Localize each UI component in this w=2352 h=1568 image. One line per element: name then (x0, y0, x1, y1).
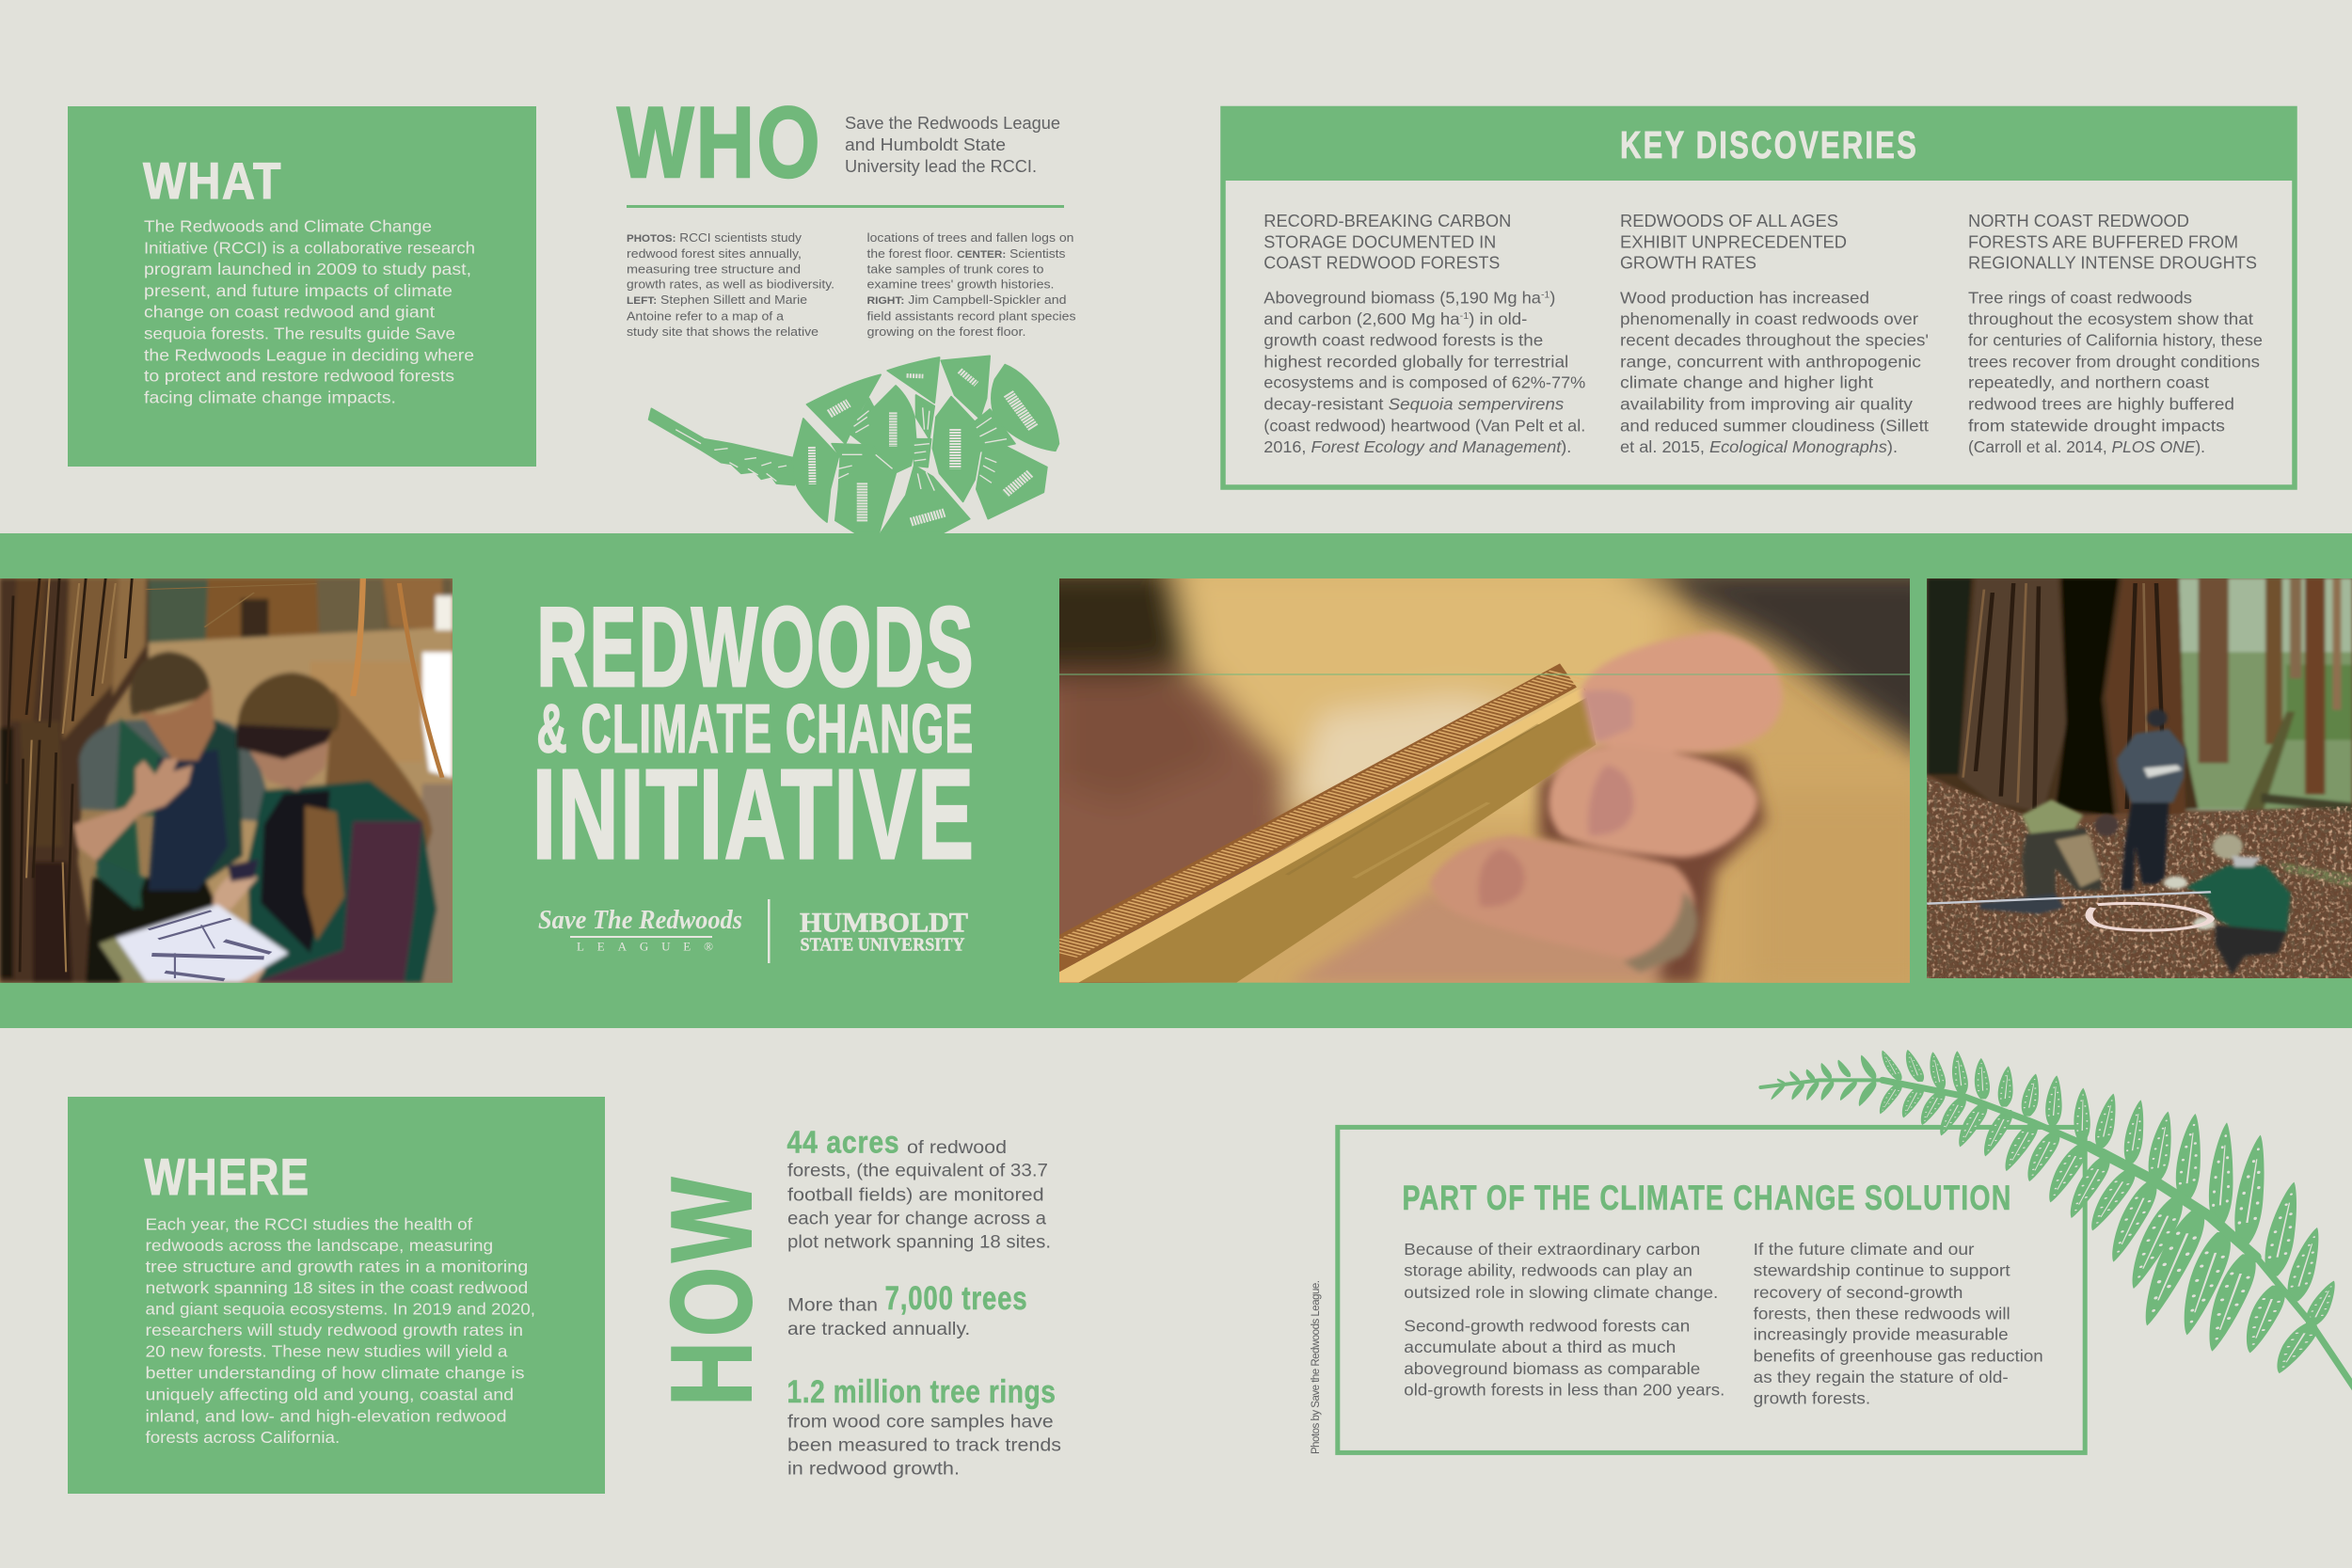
column: north coast redwood: for centuries of California history, these (1968, 331, 2263, 350)
title: redwoods and climate change initiative (532, 584, 976, 885)
column: north coast redwood: NORTH COAST REDWOOD (1968, 212, 2189, 230)
column: north coast redwood (1968, 212, 2263, 456)
stat: 44 acres: 44 acres (787, 1125, 899, 1160)
text block: what description: facing climate change impacts. (144, 388, 396, 406)
text block: what description: program launched in 2009 to study past, (144, 260, 471, 278)
column: record-breaking carbon: and carbon (2,600 Mg ha (1263, 309, 1449, 328)
heading: who: WHO (617, 86, 822, 198)
text block: photo captions: field assistants record plant species (867, 309, 1076, 324)
text block: solution right column: increasingly provide measurable (1754, 1324, 2009, 1343)
text block: where description: uniquely affecting old and young, coastal and (145, 1385, 514, 1403)
text block: solution left column: old-growth forests in less than 200 years. (1404, 1380, 1724, 1399)
column: redwoods of all ages: REDWOODS OF ALL AGES (1620, 212, 1838, 230)
text block: photo captions: locations of trees and fallen logs on (867, 230, 1074, 245)
text block: solution right column: growth forests. (1754, 1389, 1870, 1408)
text block: what description: change on coast redwood and giant (144, 302, 435, 321)
column: record-breaking carbon: COAST REDWOOD FORESTS (1263, 254, 1500, 273)
column: record-breaking carbon: -1 (1460, 311, 1470, 322)
column: redwoods of all ages: phenomenally in coast redwoods over (1620, 309, 1918, 328)
heading: climate change solution: PART OF THE CLIMATE CHANGE SOLUTION (1402, 1179, 2011, 1217)
text block: solution right column: benefits of greenhouse gas reduction (1754, 1346, 2043, 1365)
text block: who lead: and Humboldt State (845, 135, 1006, 154)
column: north coast redwood: redwood trees are highly buffered (1968, 394, 2234, 413)
text block: photo captions: Antoine refer to a map of a (627, 309, 785, 324)
text block: where description: Each year, the RCCI studies the health of (145, 1214, 472, 1233)
column: record-breaking carbon: growth coast redwood forests is the (1263, 331, 1543, 350)
column: redwoods of all ages: availability from improving air quality (1620, 394, 1913, 413)
text block: photo captions: measuring tree structure and (627, 261, 801, 277)
column: record-breaking carbon: RECORD-BREAKING CARBON (1263, 212, 1511, 230)
column: record-breaking carbon: -1 (1541, 290, 1550, 300)
text block: what description: the Redwoods League in deciding where (144, 345, 474, 364)
text block: who lead (845, 113, 1060, 176)
heading: what: WHAT (143, 151, 282, 210)
icon: fern frond (1760, 1050, 2352, 1392)
text block: photo captions: PHOTOS: RCCI scientists study (627, 230, 803, 245)
text block: photo captions: LEFT: Stephen Sillett and Marie (627, 293, 807, 307)
logo: humboldt state university: STATE UNIVERSITY (800, 935, 965, 956)
title: redwoods and climate change initiative: INITIATIVE (532, 743, 976, 885)
column: redwoods of all ages: Wood production has increased (1620, 288, 1869, 307)
heading: how: HOW (647, 1173, 775, 1406)
text block: where description: 20 new forests. These new studies will yield a (145, 1342, 508, 1361)
column: north coast redwood: throughout the ecosystem show that (1968, 309, 2253, 328)
heading: key discoveries: KEY DISCOVERIES (1620, 123, 1918, 166)
stat: 1.2 million tree rings: been measured to track trends (787, 1435, 1061, 1455)
logo: save the redwoods league: LEAGUE® (577, 940, 713, 954)
text block: where description (145, 1214, 535, 1447)
panel: how (647, 1125, 1061, 1480)
photo: tree core sample held in fingers (1059, 578, 1910, 983)
stat: 7,000 trees: More than (787, 1295, 878, 1315)
text block: what description: Initiative (RCCI) is a collaborative research (144, 238, 475, 257)
panel: part of the climate change solution (1338, 1127, 2085, 1452)
text block: photo captions: take samples of trunk cores to (867, 261, 1044, 277)
text block: solution left column: Because of their extraordinary carbon (1404, 1240, 1700, 1259)
column: north coast redwood: trees recover from drought conditions (1968, 353, 2260, 372)
text block: photo captions: redwood forest sites annually, (627, 246, 802, 261)
column: redwoods of all ages (1620, 212, 1929, 456)
logo: humboldt state university: HUMBOLDT (800, 908, 968, 939)
photo: field team on forest floor (1927, 578, 2352, 979)
text block: where description: redwoods across the landscape, measuring (145, 1236, 493, 1255)
title: redwoods and climate change initiative: REDWOODS (536, 584, 975, 710)
panel: who (617, 86, 1076, 533)
text block: solution left column: outsized role in slowing climate change. (1404, 1283, 1718, 1302)
text block: where description: inland, and low- and high-elevation redwood (145, 1406, 506, 1425)
text block: what description: to protect and restore redwood forests (144, 366, 454, 385)
text block: solution right column: stewardship continue to support (1754, 1261, 2010, 1280)
text block: solution right column: as they regain the stature of old- (1754, 1368, 2009, 1386)
text block: solution left column: accumulate about a third as much (1404, 1338, 1676, 1356)
stat: 7,000 trees (787, 1280, 1027, 1339)
column: north coast redwood: from statewide drought impacts (1968, 416, 2225, 435)
stat: 44 acres: football fields) are monitored (787, 1186, 1044, 1206)
text block: what description: present, and future impacts of climate (144, 281, 453, 300)
panel: green title band (0, 533, 2352, 1028)
text block: who lead: University lead the RCCI. (845, 156, 1037, 176)
text block: photo captions: study site that shows the relative (627, 325, 818, 339)
column: redwoods of all ages: recent decades throughout the species' (1620, 331, 1929, 350)
stat: 7,000 trees: 7,000 trees (884, 1280, 1027, 1317)
column: record-breaking carbon: (coast redwood) heartwood (Van Pelt et al. (1263, 416, 1585, 435)
text block: where description: tree structure and growth rates in a monitoring (145, 1258, 528, 1276)
stat: 44 acres (787, 1125, 1051, 1253)
text block: photo captions: RIGHT: Jim Campbell-Spickler and (867, 293, 1067, 307)
stat: 1.2 million tree rings: from wood core samples have (787, 1412, 1054, 1432)
text block: what description: The Redwoods and Climate Change (144, 217, 432, 236)
text block: photo captions: the forest floor. CENTER: Scientists (867, 246, 1066, 261)
column: north coast redwood: repeatedly, and northern coast (1968, 372, 2209, 391)
column: redwoods of all ages: and reduced summer cloudiness (Sillett (1620, 416, 1929, 435)
text block: who lead: Save the Redwoods League (845, 113, 1060, 133)
column: redwoods of all ages: et al. 2015, Ecological Monographs ). (1620, 437, 1898, 456)
text block: solution right column: recovery of second-growth (1754, 1283, 1963, 1302)
text block: where description: and giant sequoia ecosystems. In 2019 and 2020, (145, 1299, 535, 1318)
stat: 1.2 million tree rings (787, 1374, 1061, 1480)
title: redwoods and climate change initiative: & CLIMATE CHANGE (536, 692, 975, 768)
photo: scientists reading a map (0, 578, 453, 983)
stat: 44 acres: forests, (the equivalent of 33.7 (787, 1162, 1048, 1181)
column: redwoods of all ages: climate change and higher light (1620, 372, 1873, 391)
column: redwoods of all ages: range, concurrent with anthropogenic (1620, 353, 1921, 372)
text block: photo captions: examine trees' growth histories. (867, 277, 1054, 292)
column: redwoods of all ages: GROWTH RATES (1620, 254, 1756, 273)
text block: what description: sequoia forests. The results guide Save (144, 324, 455, 342)
column: north coast redwood: FORESTS ARE BUFFERED FROM (1968, 233, 2238, 252)
heading: where: WHERE (145, 1148, 310, 1206)
text block: solution right column: If the future climate and our (1754, 1240, 1975, 1259)
column: record-breaking carbon: ecosystems and is composed of 62%-77% (1263, 372, 1586, 391)
panel: what (68, 106, 536, 467)
text block: photo captions (627, 230, 1076, 339)
text block: solution left column: aboveground biomass as comparable (1404, 1359, 1700, 1378)
text block: where description: network spanning 18 sites in the coast redwood (145, 1278, 528, 1297)
logo: humboldt state university (800, 908, 968, 956)
stat: 44 acres: of redwood (907, 1138, 1007, 1158)
text block: solution left column (1404, 1240, 1724, 1399)
column: record-breaking carbon (1263, 212, 1586, 456)
stat: 1.2 million tree rings: 1.2 million tree rings (787, 1374, 1056, 1410)
column: north coast redwood: Tree rings of coast redwoods (1968, 288, 2192, 307)
panel: key discoveries (1221, 106, 2297, 487)
stat: 1.2 million tree rings: in redwood growth. (787, 1460, 960, 1480)
text block: photo captions: growing on the forest floor. (867, 325, 1025, 339)
text block: solution right column (1754, 1240, 2043, 1408)
column: record-breaking carbon: 2016, Forest Ecology and Management ). (1263, 437, 1571, 456)
text block: where description: researchers will study redwood growth rates in (145, 1321, 523, 1339)
photo credit: Photos by Save the Redwoods League. (1311, 1280, 1322, 1454)
text block: what description (144, 217, 475, 406)
logo: save the redwoods league: Save The Redwoods (538, 905, 742, 935)
column: record-breaking carbon: highest recorded globally for terrestrial (1263, 353, 1568, 372)
column: record-breaking carbon: ) in old- (1469, 309, 1527, 328)
panel: where (68, 1097, 605, 1494)
column: north coast redwood: REGIONALLY INTENSE DROUGHTS (1968, 254, 2257, 273)
icon: redwood cone (649, 356, 1058, 533)
stat: 44 acres: plot network spanning 18 sites. (787, 1233, 1051, 1253)
logo: save the redwoods league (538, 905, 742, 954)
text block: solution right column: forests, then these redwoods will (1754, 1304, 2010, 1323)
column: north coast redwood: (Carroll et al. 2014, PLOS ONE). (1968, 437, 2205, 456)
column: record-breaking carbon: decay-resistant Sequoia sempervirens (1263, 394, 1565, 413)
text block: photo captions: growth rates, as well as biodiversity. (627, 277, 834, 292)
text block: solution left column: storage ability, redwoods can play an (1404, 1261, 1692, 1280)
column: record-breaking carbon: STORAGE DOCUMENTED IN (1263, 233, 1496, 252)
text block: where description: better understanding of how climate change is (145, 1364, 525, 1383)
column: record-breaking carbon: Aboveground biomass (5,190 Mg ha (1263, 288, 1531, 307)
column: redwoods of all ages: EXHIBIT UNPRECEDENTED (1620, 233, 1847, 252)
stat: 44 acres: each year for change across a (787, 1210, 1046, 1229)
column: record-breaking carbon: ) (1549, 288, 1555, 307)
text block: where description: forests across California. (145, 1428, 340, 1447)
stat: 7,000 trees: are tracked annually. (787, 1320, 970, 1339)
text block: solution left column: Second-growth redwood forests can (1404, 1316, 1690, 1335)
